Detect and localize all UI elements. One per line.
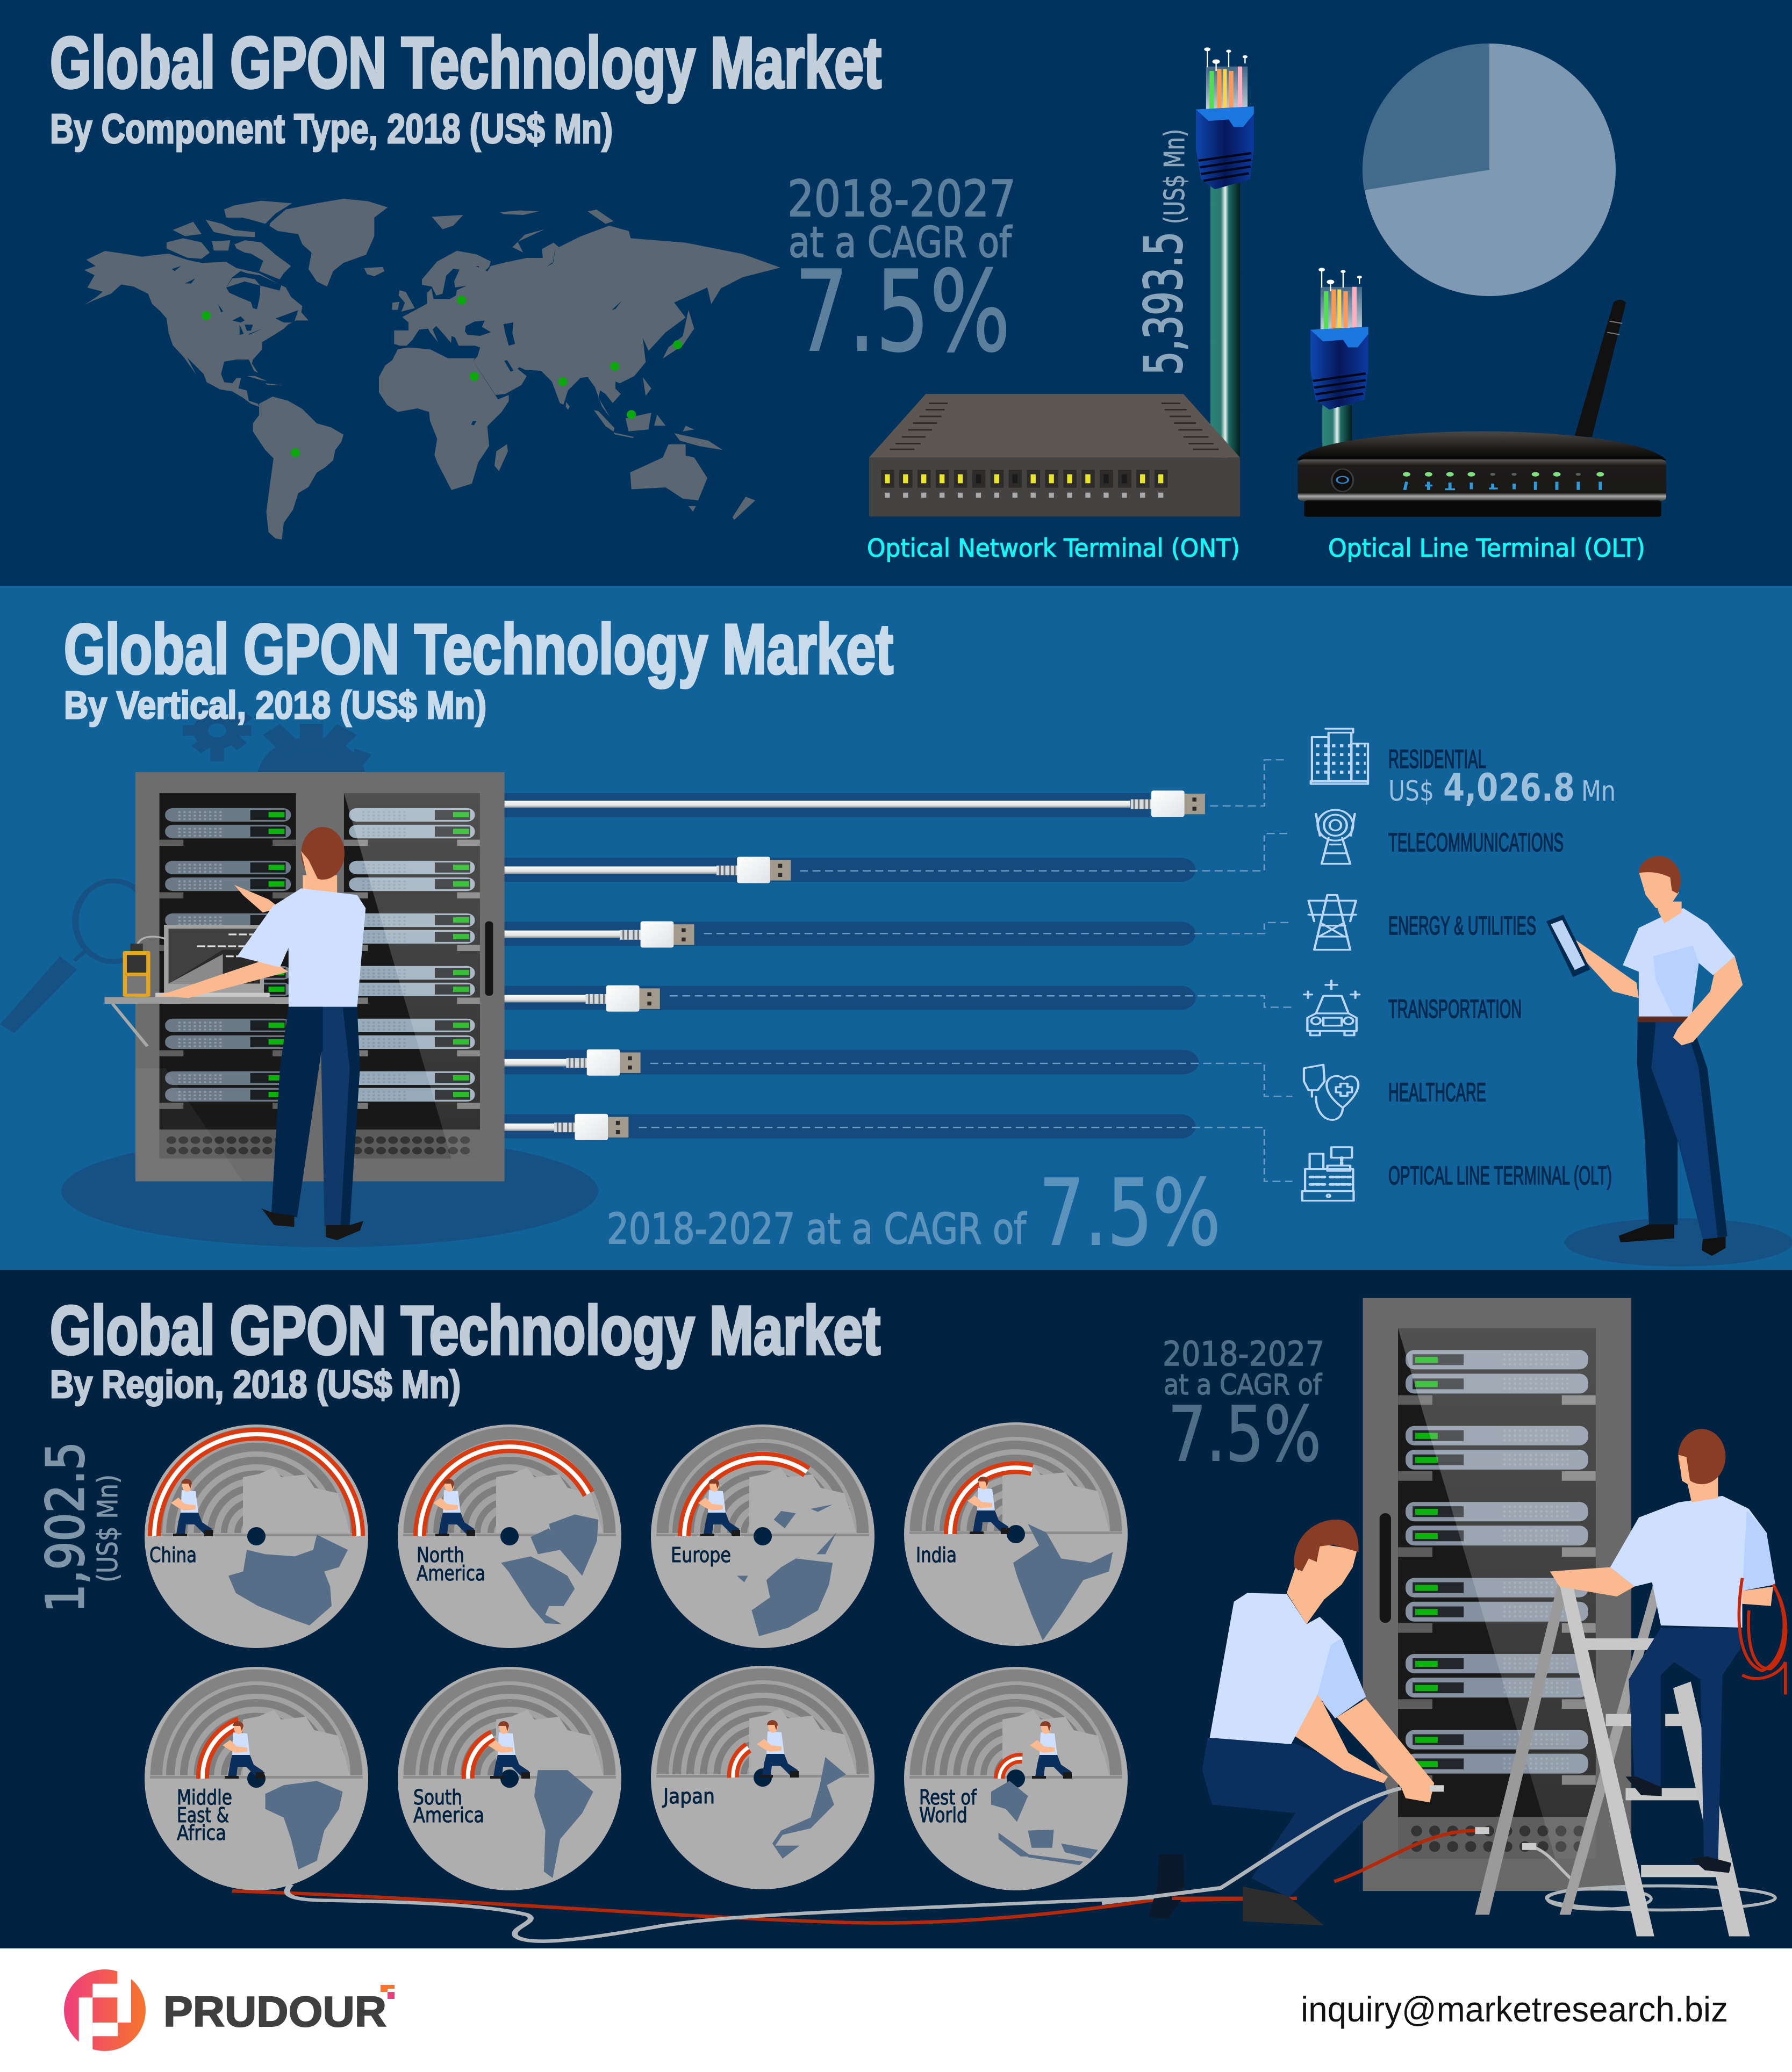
CAGR callout: at a CAGR of	[1164, 1369, 1322, 1401]
gauge: North America	[398, 1424, 621, 1648]
value label: 1,902.5 US$ Mn: 1,902.5	[35, 1442, 96, 1613]
panel: by component type	[50, 22, 1666, 563]
cables with USB plugs	[505, 790, 1205, 1140]
vertical labels: OPTICAL LINE TERMINAL (OLT)	[1388, 1162, 1612, 1190]
icon: telecom tower	[1316, 810, 1355, 864]
right side of vertical panel	[1302, 729, 1792, 1267]
logo	[64, 1967, 146, 2053]
gauge: South America: America	[413, 1803, 484, 1827]
vertical labels: HEALTHCARE	[1388, 1078, 1486, 1107]
rack patch cables	[1334, 1827, 1775, 1910]
value label: 5,393.5 US$ Mn: (US$ Mn)	[1159, 129, 1191, 224]
panel: by vertical	[0, 609, 1792, 1267]
footer	[64, 1967, 1728, 2053]
technician on ladder	[1550, 1429, 1786, 1873]
icon: healthcare	[1304, 1064, 1358, 1120]
gauge: South America	[398, 1667, 621, 1890]
vertical labels: Mn	[1581, 775, 1616, 808]
technicians and rack scene	[1102, 1298, 1786, 1937]
gauge: North America: North	[417, 1543, 464, 1567]
vertical labels: US$	[1388, 775, 1434, 808]
OLT label: Optical Line Terminal (OLT)	[1328, 534, 1645, 563]
gauge: Rest of World: Rest of	[919, 1786, 977, 1809]
engineer with tablet	[1546, 856, 1792, 1267]
gauge: China	[145, 1424, 368, 1648]
ONT device with fibre cable	[869, 47, 1254, 516]
engineer at rack	[157, 827, 365, 1240]
rack	[1363, 1298, 1631, 1891]
dashed connectors	[639, 760, 1293, 1182]
floor cables	[232, 1884, 1297, 1941]
subtitle: By Region, 2018 (US$ Mn)	[50, 1363, 461, 1406]
laptop	[155, 925, 270, 997]
gauge: Japan: Japan	[662, 1785, 715, 1808]
CAGR callout	[1163, 1334, 1324, 1479]
CAGR callout: 2018-2027	[1163, 1334, 1324, 1373]
gauge: Rest of World: World	[919, 1803, 967, 1827]
logo wordmark: PRUDOUR	[163, 1988, 386, 2035]
decorative scene: rack and engineer	[0, 703, 1293, 1247]
value label: 1,902.5 US$ Mn	[35, 1442, 124, 1613]
rack	[135, 772, 505, 1182]
gauge: Rest of World	[904, 1667, 1128, 1890]
icon: car	[1304, 981, 1359, 1035]
title: Global GPON Technology Market	[50, 22, 881, 103]
pie chart	[1363, 44, 1616, 296]
CAGR callout: 7.5%	[1039, 1160, 1221, 1267]
vertical labels: TELECOMMUNICATIONS	[1388, 829, 1564, 857]
gauge: South America: South	[413, 1786, 462, 1809]
vertical labels: 4,026.8	[1443, 766, 1575, 810]
magnifier	[0, 881, 151, 1033]
vertical labels: TRANSPORTATION	[1388, 995, 1522, 1024]
title: Global GPON Technology Market	[50, 1292, 880, 1369]
gauge: Middle East & Africa: Middle	[177, 1786, 232, 1809]
gears	[183, 703, 371, 821]
gauge: India: India	[916, 1543, 957, 1567]
CAGR callout: 2018-2027 at a CAGR of	[607, 1205, 1027, 1254]
CAGR callout	[787, 170, 1016, 377]
value label: 1,902.5 US$ Mn: (US$ Mn)	[92, 1474, 124, 1582]
desk	[105, 997, 293, 1046]
contact email: inquiry@marketresearch.biz	[1301, 1989, 1728, 2029]
kneeling technician	[1102, 1520, 1444, 1925]
CAGR callout: 7.5%	[794, 247, 1010, 377]
gauge: China: China	[149, 1543, 197, 1567]
value label: 5,393.5 US$ Mn: 5,393.5	[1134, 232, 1194, 375]
gauge: Japan	[651, 1666, 875, 1889]
subtitle: By Component Type, 2018 (US$ Mn)	[50, 106, 613, 152]
ONT label: Optical Network Terminal (ONT)	[867, 534, 1240, 563]
gauge: India	[904, 1422, 1128, 1646]
subtitle: By Vertical, 2018 (US$ Mn)	[64, 684, 486, 727]
OLT device with fibre cable	[1296, 268, 1666, 517]
meter	[123, 937, 166, 997]
panel: by region	[35, 1292, 1786, 1941]
CAGR callout: 7.5%	[1168, 1391, 1321, 1479]
gauge: Middle East & Africa: East &	[177, 1803, 229, 1827]
vertical labels: ENERGY & UTILITIES	[1388, 912, 1536, 940]
CAGR callout	[607, 1160, 1221, 1267]
logo accent	[381, 1985, 395, 1999]
gauge: Europe	[651, 1424, 875, 1648]
ladder	[1475, 1580, 1750, 1937]
icon: pylon	[1308, 895, 1356, 950]
vertical labels: RESIDENTIAL	[1388, 745, 1486, 774]
CAGR callout: at a CAGR of	[789, 219, 1012, 267]
gauge: North America: America	[417, 1562, 485, 1585]
gauge: Middle East & Africa	[145, 1667, 368, 1890]
icon: residential building	[1311, 729, 1368, 784]
vertical labels	[1388, 745, 1616, 1190]
CAGR callout: 2018-2027	[787, 170, 1016, 228]
icon: cash register	[1302, 1147, 1353, 1200]
cable tracks	[505, 793, 1199, 1139]
world map	[84, 199, 780, 539]
gauge: Europe: Europe	[671, 1543, 731, 1567]
gauge: Middle East & Africa: Africa	[177, 1821, 226, 1845]
title: Global GPON Technology Market	[64, 609, 893, 688]
